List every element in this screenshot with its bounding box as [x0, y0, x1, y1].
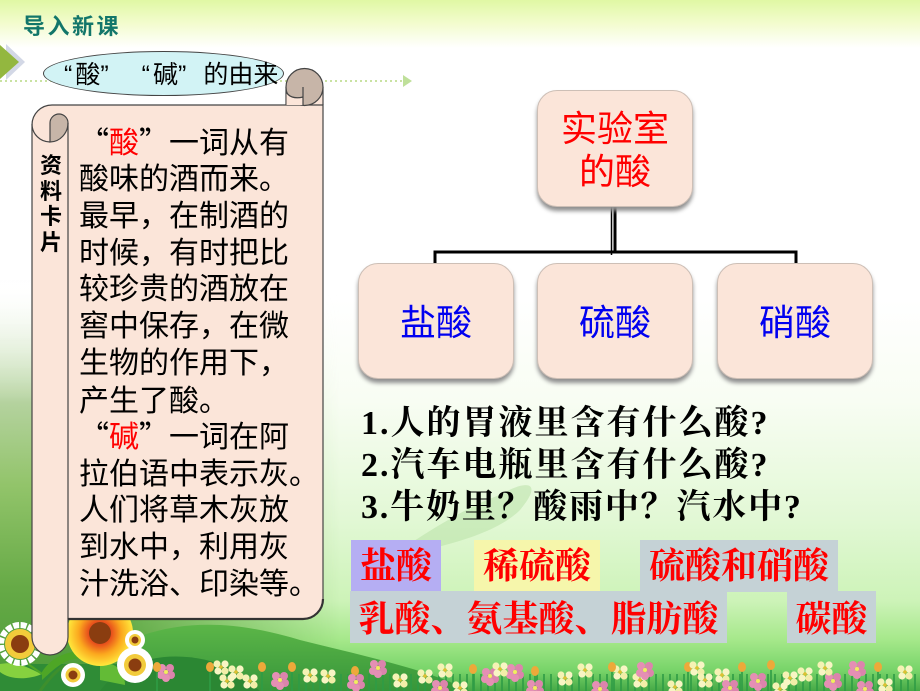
answer: battery acid: 稀硫酸: [483, 546, 591, 586]
answer: acid rain: [640, 540, 838, 592]
vertical label: data card: 片: [40, 230, 62, 255]
box: nitric acid: 硝酸: [759, 302, 831, 342]
scroll text: 拉伯语中表示灰。: [79, 449, 319, 493]
scroll text: 窖中保存，在微: [79, 301, 289, 345]
vertical label: data card: 卡: [40, 204, 62, 229]
box: sulfuric acid: [537, 263, 693, 379]
scroll text: 人们将草木灰放: [79, 485, 289, 529]
tree connector lines: [434, 207, 798, 263]
scroll text: 时候，有时把比: [79, 228, 289, 272]
answer: stomach acid: 盐酸: [360, 546, 432, 586]
question 1: 1.人的胃液里含有什么酸?: [361, 405, 770, 442]
root box: laboratory acids: 的酸: [579, 150, 651, 192]
scroll text: 生物的作用下，: [79, 338, 289, 382]
section title: 导入新课: [23, 14, 121, 39]
scroll text: [79, 118, 319, 603]
box: hydrochloric acid: [358, 263, 514, 379]
scroll text: 产生了酸。: [79, 376, 229, 420]
scroll text: 较珍贵的酒放在: [79, 264, 289, 308]
answer: soda water: 碳酸: [795, 599, 868, 639]
answer: milk acids: 乳酸、氨基酸、脂肪酸: [358, 599, 718, 639]
question 2: 2.汽车电瓶里含有什么酸?: [361, 447, 770, 484]
answer: acid rain: 硫酸和硝酸: [649, 546, 829, 586]
heading pill: origin of acid and base: “酸” “碱” 的由来: [64, 61, 278, 89]
box: hydrochloric acid: 盐酸: [400, 302, 472, 342]
scroll text: “碱”一词在阿: [79, 412, 289, 456]
scroll text: 到水中，利用灰: [79, 522, 289, 566]
box: sulfuric acid: 硫酸: [579, 302, 651, 342]
heading pill: origin of acid and base: [43, 51, 284, 96]
vertical label: data card: 资: [40, 153, 62, 178]
answer: battery acid: [474, 540, 600, 591]
question 3: 3.牛奶里？酸雨中？汽水中?: [361, 489, 803, 526]
root box: laboratory acids: 实验室: [561, 108, 669, 148]
scroll: parchment shape: [31, 68, 324, 656]
dotted divider with arrows: [0, 44, 412, 87]
box: nitric acid: [717, 263, 873, 379]
scroll text: 汁洗浴、印染等。: [79, 559, 319, 603]
scroll text: 酸味的酒而来。: [79, 154, 289, 198]
vertical label: data card: 料: [40, 179, 62, 204]
answer: stomach acid: [351, 540, 441, 591]
vertical label: data card: [40, 153, 62, 255]
scroll text: 最早，在制酒的: [79, 191, 289, 235]
scroll text: “酸”一词从有: [79, 118, 289, 162]
root box: laboratory acids: [537, 90, 693, 207]
answer: soda water: [787, 591, 876, 643]
